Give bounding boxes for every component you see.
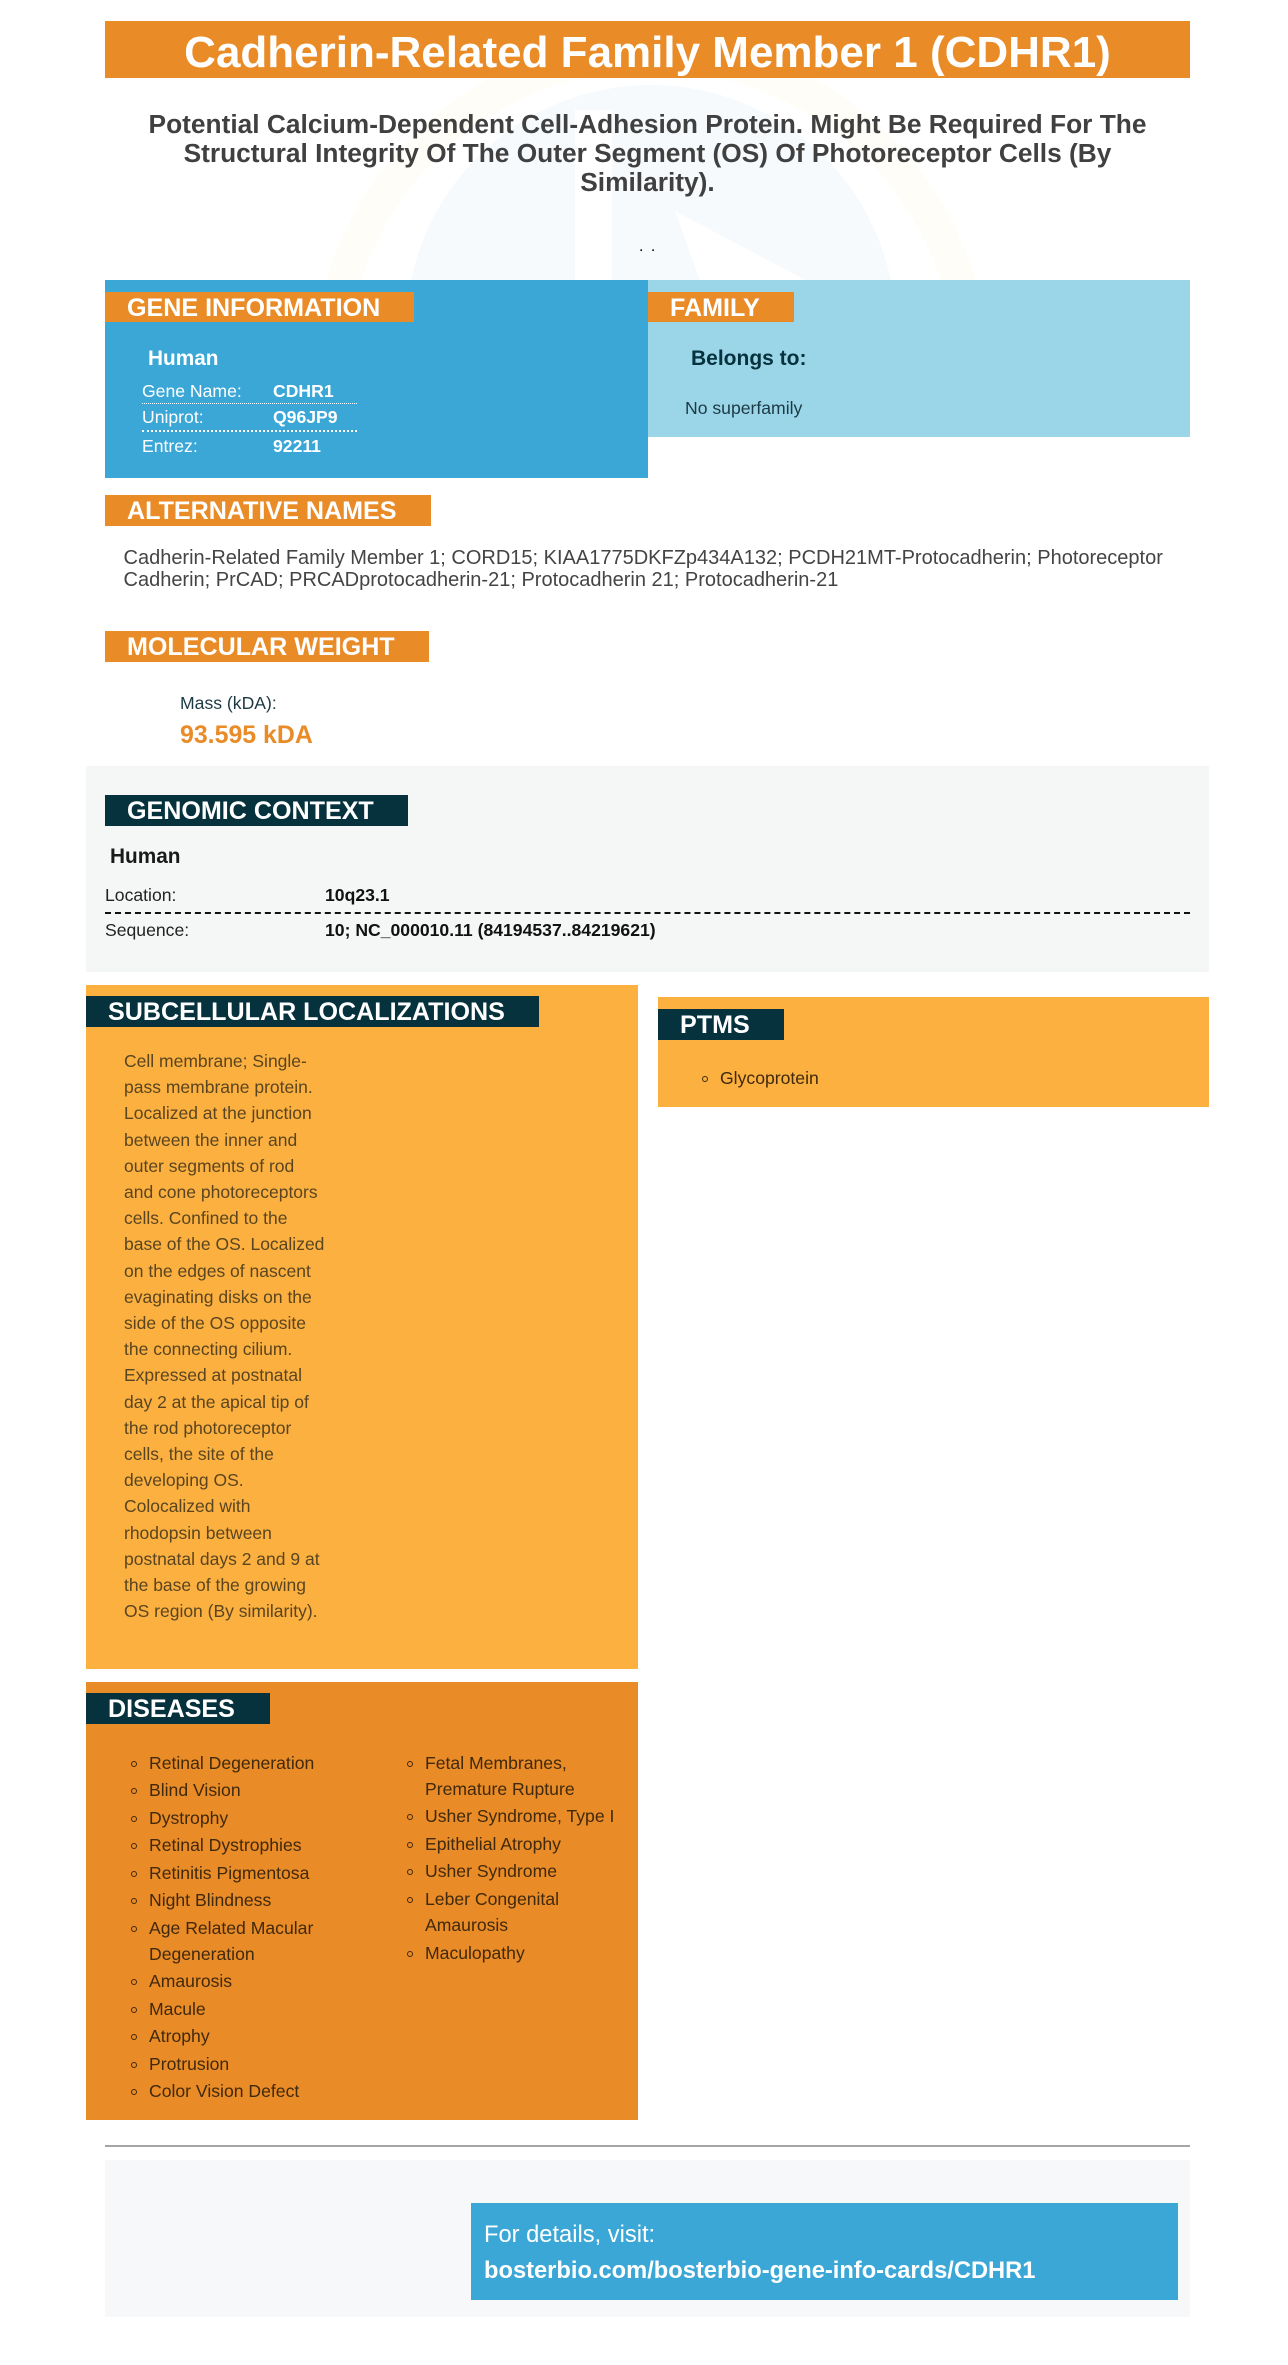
gene details table: CDHR1 <box>273 381 334 401</box>
gene details table: Entrez: <box>142 436 198 456</box>
heading: alternative names: ALTERNATIVE NAMES <box>127 497 397 525</box>
ptm list item: Glycoprotein <box>720 1068 819 1088</box>
subtitle description: Potential Calcium-Dependent Cell-Adhesion Protein. Might Be Required For The <box>149 109 1146 139</box>
disease list column 1: Degeneration <box>149 1944 255 1964</box>
sequence row: Sequence: <box>105 920 189 940</box>
callout: details link <box>471 2203 1178 2300</box>
mass label: Mass (kDA): <box>180 693 277 713</box>
disease list column 1: Age Related Macular <box>149 1918 313 1938</box>
panel: gene information <box>105 280 648 478</box>
title banner: Cadherin-Related Family Member 1 (CDHR1) <box>184 28 1111 77</box>
callout: details link: For details, visit: <box>484 2222 655 2248</box>
alternative names text <box>124 547 1163 591</box>
heading: family: FAMILY <box>670 294 760 322</box>
subtitle description: Structural Integrity Of The Outer Segment (OS) Of Photoreceptor Cells (By <box>184 138 1111 168</box>
background watermark logo <box>412 85 890 280</box>
localization text: cells. Confined to the <box>124 1208 287 1228</box>
localization text: the base of the growing <box>124 1575 306 1595</box>
disease list column 1: Retinitis Pigmentosa <box>149 1863 309 1883</box>
disease list column 1: Blind Vision <box>149 1780 241 1800</box>
alternative names text: Cadherin-Related Family Member 1; CORD15; KIAA1775DKFZp434A132; PCDH21MT-Protocadherin; Photoreceptor <box>124 547 1163 569</box>
disease list column 2: Usher Syndrome <box>425 1861 557 1881</box>
gene details table: Q96JP9 <box>273 407 338 427</box>
gene details table <box>142 381 357 456</box>
family value: No superfamily <box>685 398 802 418</box>
callout: details link: bosterbio.com/bosterbio-gene-info-cards/CDHR1 <box>484 2258 1035 2284</box>
localization text: on the edges of nascent <box>124 1261 311 1281</box>
localization text <box>124 1051 324 1621</box>
alternative names text: Cadherin; PrCAD; PRCADprotocadherin-21; Protocadherin 21; Protocadherin-21 <box>124 569 838 591</box>
disease list column 1 <box>131 1753 314 2101</box>
localization text: side of the OS opposite <box>124 1313 306 1333</box>
panel: footer <box>105 2160 1190 2317</box>
disease list column 1: Night Blindness <box>149 1890 271 1910</box>
location row: 10q23.1 <box>325 885 390 905</box>
species label: Human <box>148 347 218 370</box>
localization text: Expressed at postnatal <box>124 1365 302 1385</box>
gene details table: 92211 <box>273 436 321 456</box>
localization text: OS region (By similarity). <box>124 1601 318 1621</box>
disease list column 2 <box>407 1753 614 1963</box>
localization text: pass membrane protein. <box>124 1077 313 1097</box>
sequence row <box>105 920 656 940</box>
heading: diseases: DISEASES <box>108 1695 235 1723</box>
disease list column 2: Usher Syndrome, Type I <box>425 1806 614 1826</box>
disease list column 1: Color Vision Defect <box>149 2081 299 2101</box>
disease list column 1: Atrophy <box>149 2026 210 2046</box>
disease list column 1: Retinal Dystrophies <box>149 1835 302 1855</box>
heading: genomic context: GENOMIC CONTEXT <box>127 797 374 825</box>
heading: family <box>648 292 794 322</box>
heading: gene information: GENE INFORMATION <box>127 294 380 322</box>
sequence row: 10; NC_000010.11 (84194537..84219621) <box>325 920 656 940</box>
panel: subcellular localizations <box>86 985 638 1669</box>
mass value: 93.595 kDA <box>180 721 313 749</box>
disease list column 1: Dystrophy <box>149 1808 228 1828</box>
heading: ptms: PTMS <box>680 1011 750 1039</box>
small dots: . . <box>639 238 655 255</box>
subtitle description: Similarity). <box>580 167 715 197</box>
belongs to label: Belongs to: <box>691 347 806 370</box>
disease list column 1: Retinal Degeneration <box>149 1753 314 1773</box>
panel: diseases <box>86 1682 638 2120</box>
species label: Human <box>110 845 180 868</box>
disease list column 2: Maculopathy <box>425 1943 525 1963</box>
localization text: between the inner and <box>124 1130 297 1150</box>
localization text: rhodopsin between <box>124 1523 272 1543</box>
disease list column 2: Amaurosis <box>425 1915 508 1935</box>
gene details table: Gene Name: <box>142 381 242 401</box>
disease list column 2: Premature Rupture <box>425 1779 575 1799</box>
localization text: cells, the site of the <box>124 1444 274 1464</box>
localization text: Cell membrane; Single- <box>124 1051 307 1071</box>
disease list column 1: Protrusion <box>149 2054 229 2074</box>
heading: ptms <box>658 1009 784 1040</box>
localization text: day 2 at the apical tip of <box>124 1392 309 1412</box>
disease list column 1: Amaurosis <box>149 1971 232 1991</box>
localization text: and cone photoreceptors <box>124 1182 318 1202</box>
gene details table: Uniprot: <box>142 407 204 427</box>
localization text: outer segments of rod <box>124 1156 294 1176</box>
localization text: developing OS. <box>124 1470 244 1490</box>
localization text: the rod photoreceptor <box>124 1418 291 1438</box>
location row: Location: <box>105 885 176 905</box>
localization text: Localized at the junction <box>124 1103 312 1123</box>
heading: molecular weight: MOLECULAR WEIGHT <box>127 633 395 661</box>
disease list column 2: Leber Congenital <box>425 1889 559 1909</box>
localization text: the connecting cilium. <box>124 1339 292 1359</box>
localization text: base of the OS. Localized <box>124 1234 324 1254</box>
localization text: Colocalized with <box>124 1496 250 1516</box>
subtitle description <box>149 109 1146 197</box>
heading: diseases <box>86 1693 270 1724</box>
panel: family <box>648 280 1190 437</box>
localization text: postnatal days 2 and 9 at <box>124 1549 320 1569</box>
disease list column 2: Epithelial Atrophy <box>425 1834 561 1854</box>
panel: ptms <box>658 997 1209 1107</box>
disease list column 1: Macule <box>149 1999 206 2019</box>
disease list column 2: Fetal Membranes, <box>425 1753 567 1773</box>
heading: subcellular localizations: SUBCELLULAR LOCALIZATIONS <box>108 998 505 1026</box>
panel: genomic context <box>86 766 1209 972</box>
location row <box>105 885 390 905</box>
localization text: evaginating disks on the <box>124 1287 312 1307</box>
